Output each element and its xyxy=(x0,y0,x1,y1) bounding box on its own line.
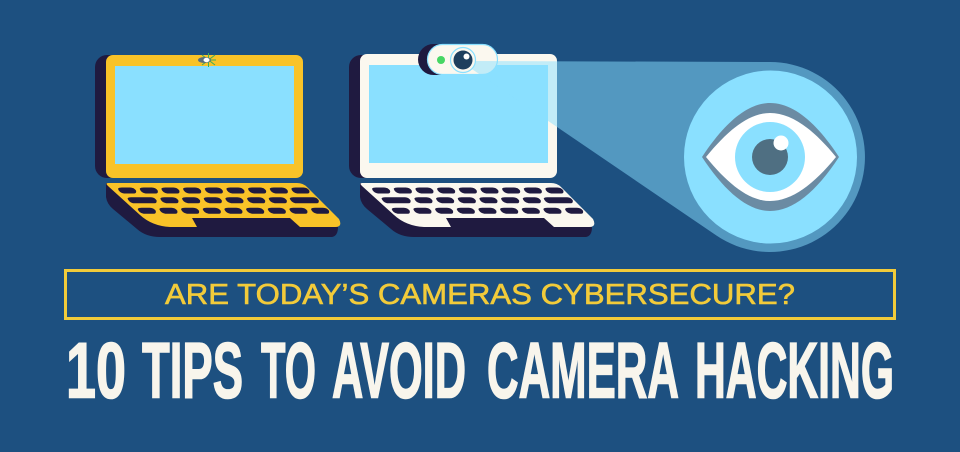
laptop lid bezel xyxy=(106,55,303,178)
light beam from webcam to eye xyxy=(463,61,865,252)
pupil xyxy=(752,139,788,175)
laptop: white, with hacked webcam xyxy=(349,54,594,237)
laptop screen xyxy=(369,65,548,163)
eye outer lid xyxy=(702,103,839,211)
subtitle: ARE TODAY’S CAMERAS CYBERSECURE? xyxy=(165,279,795,311)
laptop lid shadow xyxy=(349,55,409,178)
laptop lid bezel xyxy=(360,54,557,178)
keyboard shadow xyxy=(360,183,592,237)
pupil highlight xyxy=(774,136,788,150)
title: CAMERA xyxy=(487,326,679,414)
laptop: yellow, infected with bug xyxy=(95,53,340,237)
webcam lens xyxy=(450,48,476,72)
keyboard shadow xyxy=(106,183,338,237)
magnifier circle xyxy=(684,70,857,244)
iris xyxy=(735,122,805,192)
subtitle box xyxy=(66,270,894,318)
webcam green indicator light xyxy=(437,56,445,64)
webcam cover shadow xyxy=(418,44,468,75)
title: 10 xyxy=(66,326,126,414)
title: AVOID xyxy=(332,326,466,414)
keyboard keys xyxy=(372,188,583,214)
webcam cover body xyxy=(428,44,498,74)
eye in magnifier circle xyxy=(684,70,857,244)
keyboard deck xyxy=(360,183,594,227)
title: TO xyxy=(261,326,316,414)
laptop lid shadow xyxy=(95,55,155,178)
eye white xyxy=(706,113,836,201)
title xyxy=(66,326,894,414)
title: TIPS xyxy=(142,326,243,414)
icon: bug on webcam xyxy=(198,53,216,67)
keyboard keys xyxy=(118,188,329,214)
laptop screen xyxy=(115,66,294,164)
keyboard deck xyxy=(106,183,340,227)
